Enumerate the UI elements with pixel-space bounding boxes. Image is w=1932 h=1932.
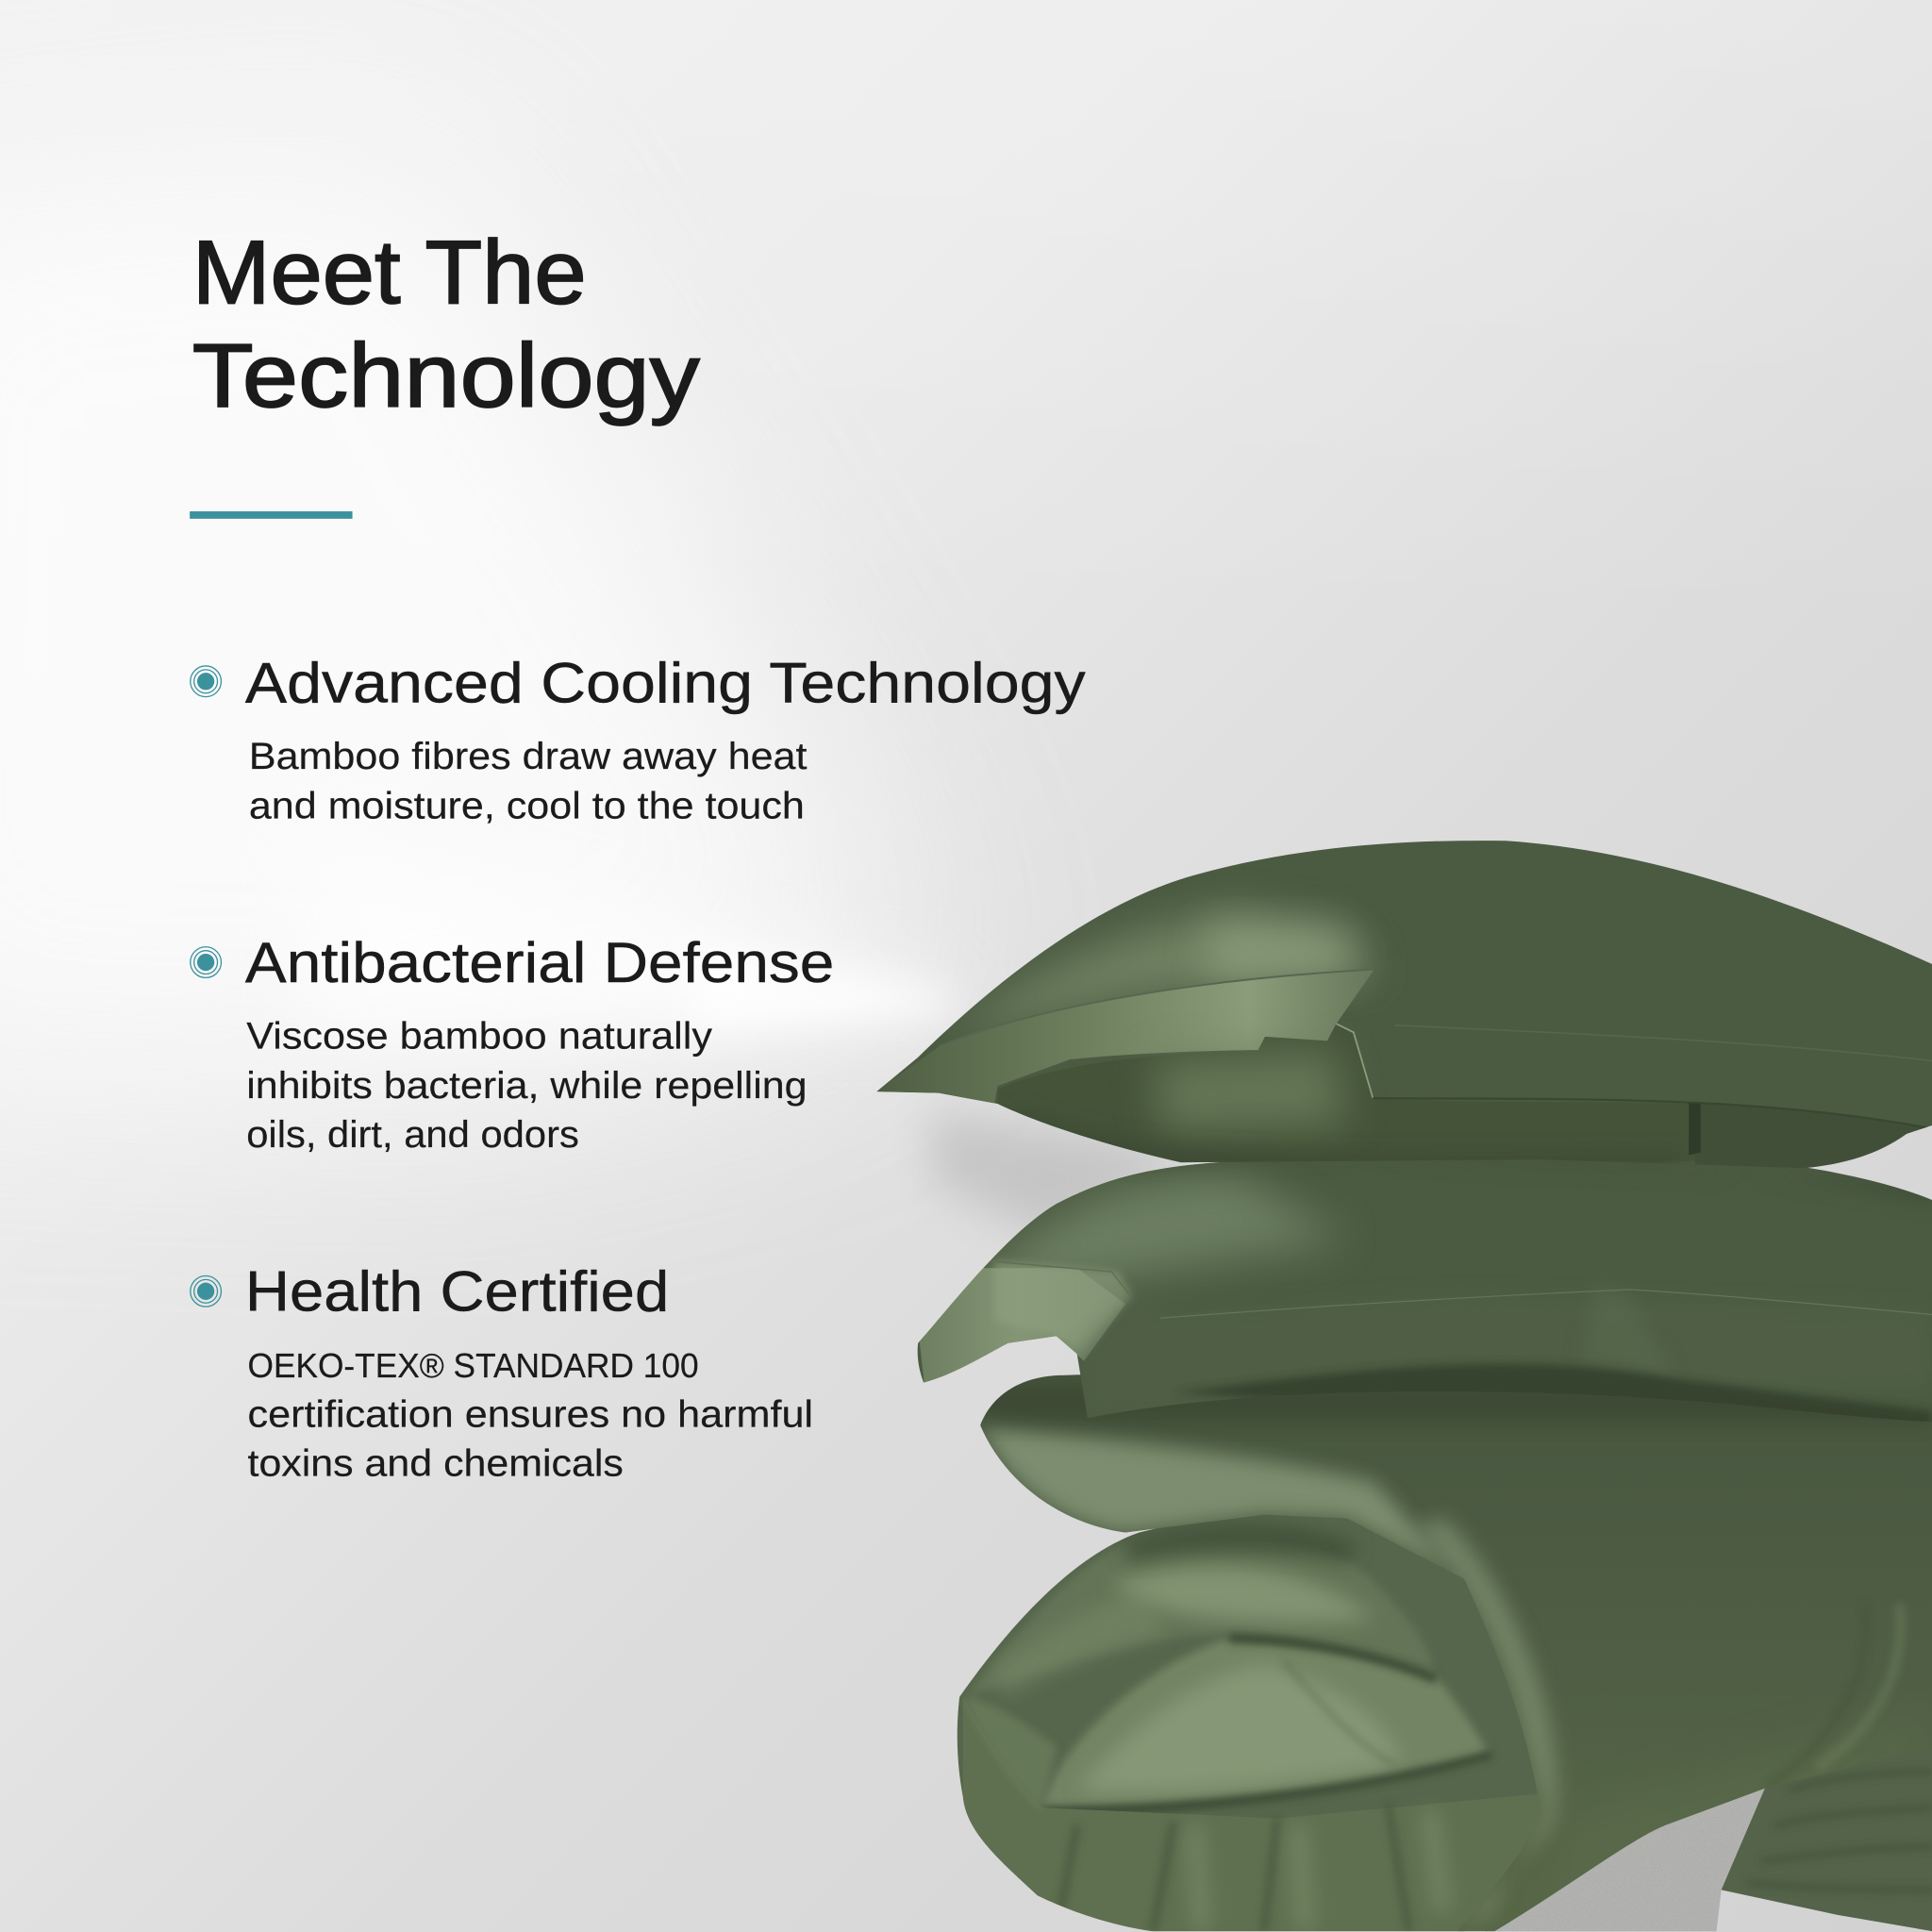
description: and moisture, cool to the touch xyxy=(249,785,805,826)
description: OEKO-TEX® STANDARD 100 xyxy=(248,1346,699,1385)
product image: stacked green bamboo bedding xyxy=(870,832,1932,1932)
icon: teal target bullet xyxy=(191,666,221,697)
icon: teal target bullet xyxy=(191,1275,221,1307)
top pillow xyxy=(870,832,1932,1175)
front flap xyxy=(1336,1024,1373,1098)
shiny highlight xyxy=(946,910,1374,1040)
heading: Antibacterial Defense xyxy=(245,931,834,994)
flange xyxy=(876,970,1374,1106)
heading: Health Certified xyxy=(245,1260,669,1324)
heading: Advanced Cooling Technology xyxy=(245,651,1086,714)
description: inhibits bacteria, while repelling xyxy=(246,1065,808,1107)
stone pedestal xyxy=(1485,1789,1765,1931)
duvet main surface xyxy=(953,1361,1932,1932)
description xyxy=(246,1016,808,1156)
feature: Advanced Cooling Technology xyxy=(191,651,1086,826)
duvet underside folds xyxy=(1722,1743,1932,1931)
right tail of pillow xyxy=(1692,1103,1932,1175)
title xyxy=(192,223,700,426)
feature: Antibacterial Defense xyxy=(191,931,834,1156)
upper roll lobe xyxy=(975,1549,1430,1691)
icon: teal target bullet xyxy=(191,947,221,977)
shadow behind pillows xyxy=(932,1111,1194,1240)
description xyxy=(248,1346,813,1485)
feature: Health Certified xyxy=(191,1260,813,1485)
description: toxins and chemicals xyxy=(248,1443,624,1485)
description: Bamboo fibres draw away heat xyxy=(249,736,808,777)
description: oils, dirt, and odors xyxy=(246,1114,579,1156)
flange stitching xyxy=(939,970,1374,1046)
title underline xyxy=(190,511,353,519)
title: Meet The xyxy=(192,223,587,323)
duvet roll xyxy=(957,1515,1541,1932)
description: certification ensures no harmful xyxy=(248,1393,813,1435)
middle pillow xyxy=(911,1146,1932,1432)
description xyxy=(249,736,808,826)
description: Viscose bamboo naturally xyxy=(246,1016,712,1058)
title: Technology xyxy=(192,326,700,426)
inner pillow shading xyxy=(997,1024,1696,1162)
lower left and bottom folds xyxy=(963,1697,1582,1931)
lower roll lobe xyxy=(1042,1636,1489,1807)
